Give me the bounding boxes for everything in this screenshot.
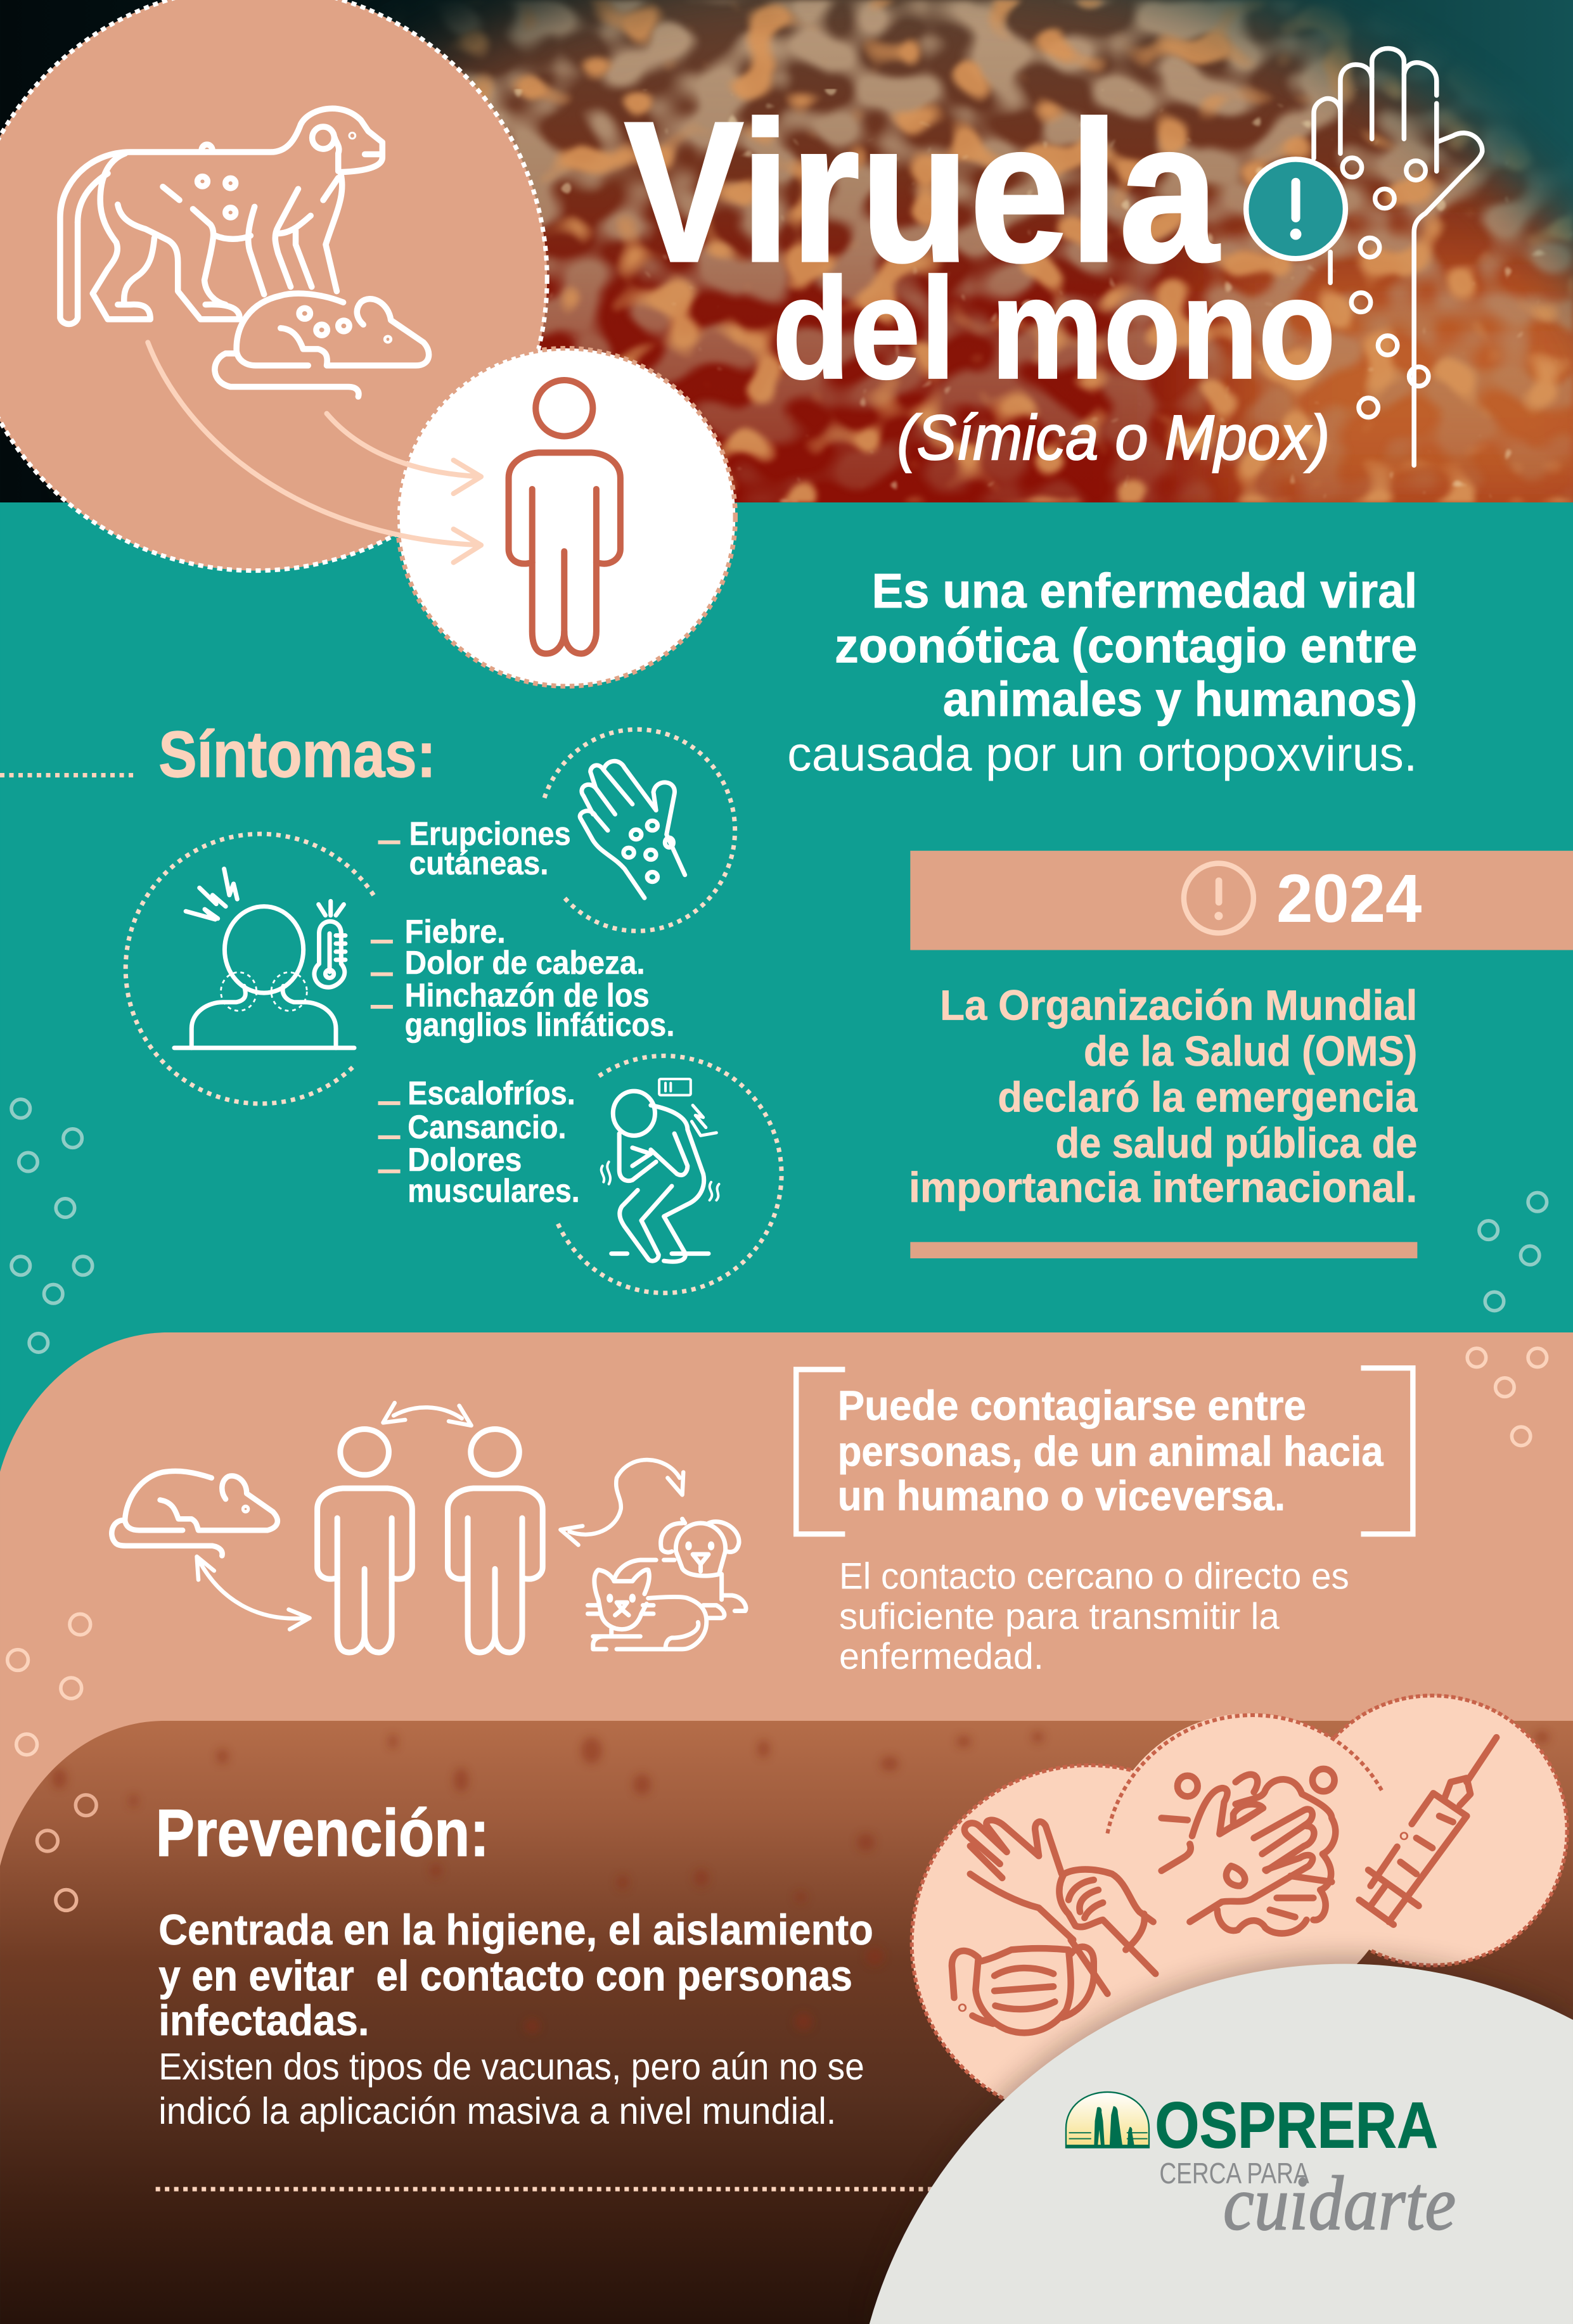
heading: symptoms: Síntomas: [158, 718, 436, 791]
bracketed callout: contagion: un humano o viceversa. [838, 1473, 1285, 1519]
icon: alert badge [1246, 159, 1345, 259]
text: prevention [158, 1906, 873, 2132]
icon: alert circle [1184, 864, 1254, 933]
icon: washing hands [1162, 1769, 1335, 1933]
icon: human figure [509, 380, 620, 654]
logo emblem [1066, 2092, 1149, 2148]
logo: OSPRERA: CERCA PARA [1159, 2157, 1309, 2190]
symptom text: chills, tiredness, aches [378, 1075, 580, 1209]
logo: OSPRERA: OSPRERA [1155, 2089, 1438, 2162]
symptom: hand rash icon [544, 729, 735, 931]
symptom: crouching person icon [558, 1056, 781, 1293]
intro text [787, 564, 1417, 781]
bracketed callout: contagion: Puede contagiarse entre [838, 1382, 1306, 1429]
intro text: causada por un ortopoxvirus. [787, 727, 1417, 781]
intro text: Es una enfermedad viral [872, 564, 1417, 618]
title [624, 80, 1336, 473]
symptom text: chills, tiredness, aches: Cansancio. [408, 1109, 567, 1146]
text: prevention: indicó la aplicación masiva a nivel mundial. [158, 2090, 836, 2132]
text: close contact: enfermedad. [839, 1636, 1044, 1677]
title: del mono [773, 249, 1336, 409]
icon: rat [215, 293, 429, 397]
text: WHO declaration [909, 982, 1418, 1211]
icon: monkey [60, 108, 382, 324]
text: WHO declaration: de la Salud (OMS) [1084, 1028, 1417, 1075]
panel: logo [870, 1964, 1573, 2324]
text: close contact [839, 1556, 1349, 1677]
symptom text: chills, tiredness, aches: musculares. [408, 1172, 580, 1209]
bracketed callout: contagion [796, 1368, 1413, 1534]
icon: gloves and mask [952, 1820, 1155, 2033]
title: Viruela [624, 80, 1220, 303]
text: WHO declaration: declaró la emergencia [998, 1074, 1418, 1121]
header photo: virus macro [0, 0, 1573, 533]
symptom text: skin [378, 815, 571, 881]
arrows: contagion directions [197, 1403, 683, 1630]
dotted rule [156, 2188, 949, 2190]
symptom text: fever, headache, glands: Fiebre. [405, 913, 506, 950]
section: teal background [0, 489, 1573, 1497]
heading: prevention: Prevención: [156, 1796, 489, 1870]
shadow behind logo panel [870, 1955, 1573, 2324]
symptom: head and thermometer icon [125, 834, 374, 1104]
icon: hand with pustules [1246, 48, 1482, 465]
text: prevention: Centrada en la higiene, el aislamiento [158, 1906, 873, 1954]
logo: OSPRERA: cuidarte [1223, 2161, 1456, 2246]
text: prevention: y en evitar el contacto con personas [158, 1953, 852, 2000]
band: 2024 [910, 851, 1573, 950]
symptom text: fever, headache, glands: Hinchazón de los [405, 976, 650, 1013]
symptom text: chills, tiredness, aches: Escalofríos. [408, 1075, 575, 1111]
icon: syringe [1359, 1737, 1496, 1925]
icon: person two [447, 1429, 543, 1652]
text: close contact: suficiente para transmitir la [839, 1596, 1280, 1637]
title: (Símica o Mpox) [897, 402, 1330, 473]
text: WHO declaration: importancia internacional. [909, 1165, 1417, 1211]
section: transmission panel background [0, 1332, 1573, 1927]
illustration: animals circle [0, 0, 547, 571]
section: prevention photo background [0, 1704, 1573, 2324]
illustration: human circle [397, 348, 735, 686]
symptom text: skin: Erupciones [409, 815, 571, 852]
bracketed callout: contagion: personas, de un animal hacia [838, 1429, 1384, 1475]
text: prevention: Existen dos tipos de vacunas, pero aún no se [158, 2045, 864, 2088]
icon: rat [112, 1471, 278, 1555]
transmission diagram [112, 1403, 746, 1652]
icon: dog and cat [587, 1519, 746, 1649]
arrows: animals to human [148, 342, 481, 563]
symptom text: fever, headache, glands [371, 913, 674, 1043]
text: WHO declaration: de salud pública de [1056, 1120, 1417, 1167]
text: WHO declaration: La Organización Mundial [940, 982, 1417, 1029]
symptom text: fever, headache, glands: ganglios linfáticos. [405, 1006, 674, 1043]
icon: person one [318, 1429, 412, 1652]
text: prevention: infectadas. [158, 1997, 369, 2045]
prevention circles [912, 1695, 1567, 2121]
text: close contact: El contacto cercano o directo es [839, 1556, 1349, 1597]
intro text: zoonótica (contagio entre [835, 619, 1417, 674]
logo: OSPRERA [1066, 2089, 1456, 2246]
band: 2024: 2024 [1276, 860, 1422, 936]
decorative bubbles [8, 1099, 1547, 1910]
symptom text: chills, tiredness, aches: Dolores [408, 1141, 522, 1178]
symptom text: fever, headache, glands: Dolor de cabeza. [405, 944, 645, 981]
symptom text: skin: cutáneas. [409, 845, 549, 881]
intro text: animales y humanos) [943, 672, 1417, 727]
